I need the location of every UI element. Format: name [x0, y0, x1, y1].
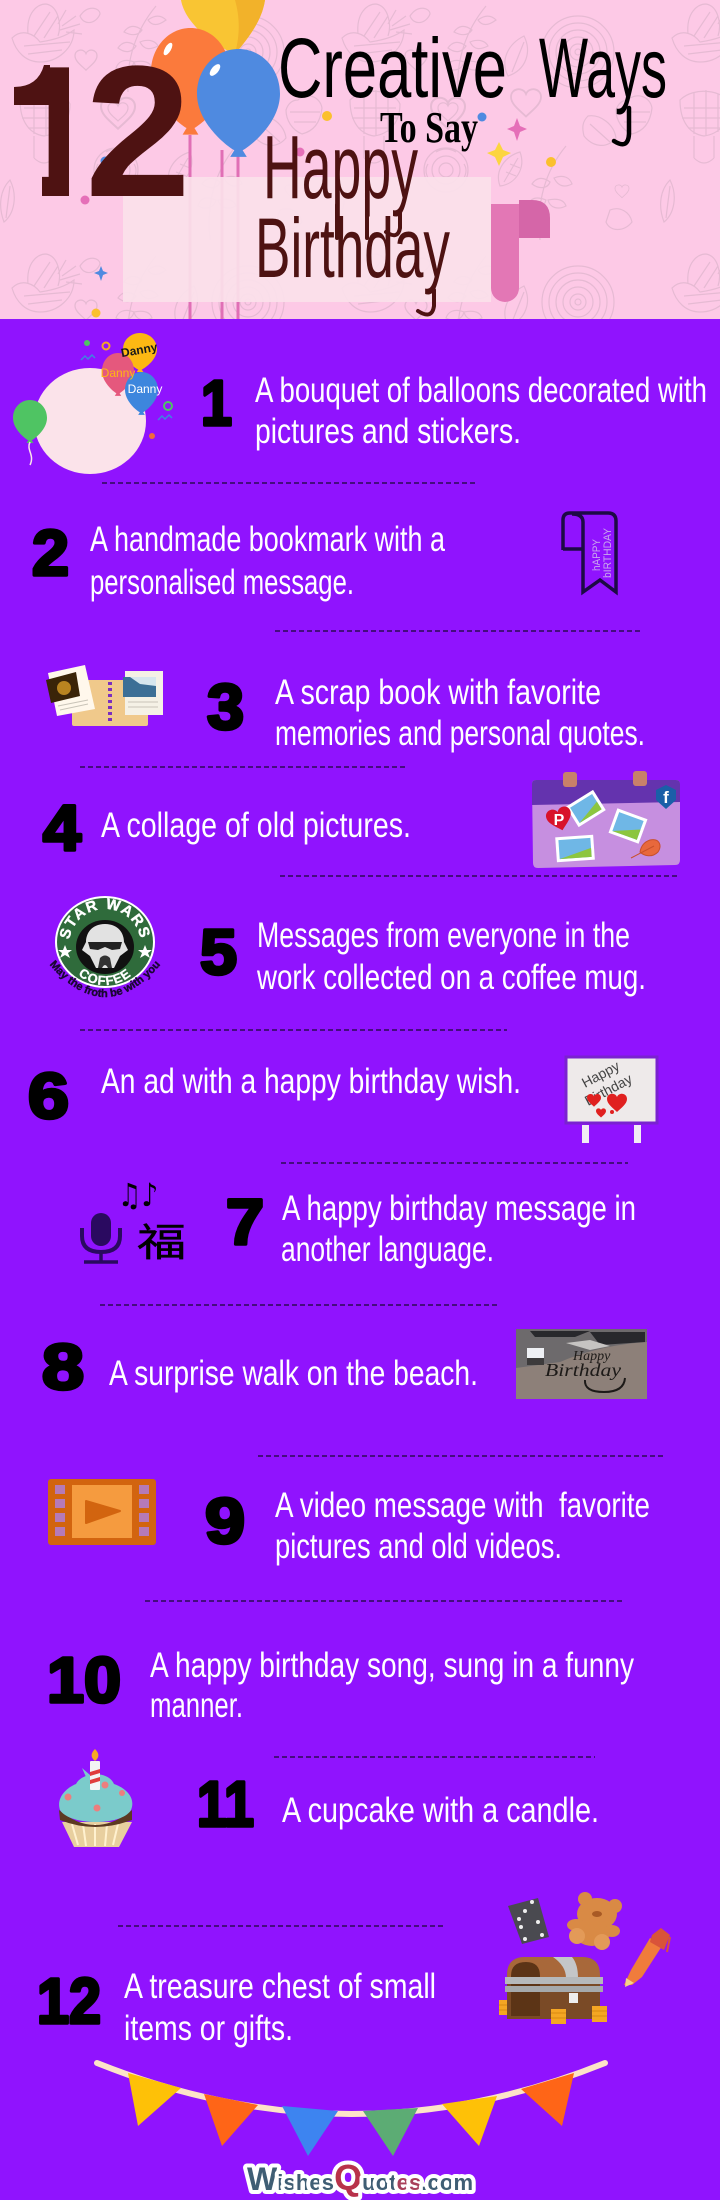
icon: star wars coffee logo: STAR WARS	[60, 898, 150, 939]
text: manner.	[150, 1686, 243, 1725]
title: Creative Ways	[278, 21, 667, 144]
icon: billboard	[566, 1057, 657, 1143]
balloon: yellow	[181, 0, 265, 54]
item 2: bookmark	[32, 513, 616, 602]
number 12: 12	[37, 1965, 101, 2037]
text: An ad with a happy birthday wish.	[101, 1062, 521, 1101]
text: A collage of old pictures.	[101, 806, 411, 845]
icon: balloon bouquet: Danny	[128, 382, 162, 396]
number 6: 6	[28, 1060, 69, 1132]
item 10: song	[47, 1644, 634, 1725]
icon: pen	[624, 1928, 670, 1987]
number 3: 3	[207, 671, 244, 743]
text: items or gifts.	[124, 2009, 293, 2048]
big number 12	[14, 65, 184, 196]
balloon: blue	[197, 49, 280, 157]
logo: WishesQuotes.com: WishesQuotes.com	[247, 2157, 473, 2198]
icon: bookmark: hAPPY	[591, 538, 603, 571]
number 2: 2	[32, 517, 69, 589]
icon: video film	[48, 1479, 156, 1545]
header pink background	[0, 0, 720, 319]
item 6: ad	[28, 1057, 657, 1143]
icon: calendar collage	[532, 771, 680, 868]
icon: balloon bouquet: Danny	[101, 366, 135, 380]
icon: scrap book	[46, 665, 163, 726]
icon: treasure chest	[499, 1957, 607, 2024]
text	[256, 916, 646, 997]
photo: birthday written on sand	[516, 1329, 647, 1399]
item 7: another language	[82, 1176, 636, 1269]
text: pictures and stickers.	[255, 412, 521, 451]
text	[275, 1486, 650, 1566]
icon: star wars coffee logo: May the froth be with you	[50, 960, 160, 998]
icon: star wars coffee logo: COFFEE	[80, 968, 131, 986]
decorative sparkles	[80, 111, 556, 318]
title: Happy	[263, 118, 418, 238]
text	[90, 520, 445, 602]
number 5: 5	[200, 916, 237, 988]
item 1: balloons	[13, 333, 707, 474]
icon: cupcake	[59, 1749, 132, 1847]
icon: billboard: Birthday	[582, 1070, 635, 1109]
photo: birthday written on sand: Birthday	[545, 1360, 621, 1380]
text: another language.	[281, 1230, 494, 1269]
text: A happy birthday message in	[282, 1189, 636, 1228]
text	[150, 1646, 634, 1725]
icon: bookmark: bIRTHDAY	[602, 527, 614, 578]
text	[281, 1189, 636, 1269]
text: pictures and old videos.	[275, 1527, 562, 1566]
big number 12: 1	[5, 27, 109, 236]
icon: bookmark	[563, 513, 616, 592]
balloon strings	[190, 135, 238, 319]
text: A treasure chest of small	[124, 1967, 436, 2006]
icon: calendar collage: f	[663, 788, 669, 807]
balloon: orange	[151, 28, 230, 135]
bunting garland	[97, 2063, 605, 2156]
text	[255, 371, 707, 451]
item 11: cupcake	[59, 1749, 599, 1847]
item 3: scrap book	[46, 665, 645, 753]
number 4: 4	[43, 792, 81, 864]
text: A scrap book with favorite	[275, 673, 601, 712]
text: A surprise walk on the beach.	[109, 1354, 478, 1393]
item 12: treasure chest	[37, 1892, 670, 2048]
title: Birthday: Birthday	[255, 201, 450, 295]
big number 12: 2	[85, 27, 191, 236]
title: To Say: To Say	[380, 103, 478, 152]
text: A cupcake with a candle.	[282, 1791, 599, 1830]
icon: domino	[508, 1898, 549, 1944]
text	[275, 673, 645, 753]
item 4: collage	[43, 771, 680, 868]
icon: balloon bouquet: Danny	[120, 340, 159, 360]
number 9: 9	[205, 1485, 245, 1557]
number 1: 1	[201, 367, 232, 439]
panel: header	[0, 0, 720, 319]
icon: balloon bouquet	[13, 333, 172, 474]
icon: music notes: ♫♪	[118, 1176, 158, 1214]
ribbon banner	[123, 177, 550, 302]
number 11: 11	[197, 1768, 254, 1840]
icon: microphone	[82, 1213, 120, 1262]
icon: calendar collage: P	[554, 812, 565, 829]
icon: fu character: 福	[137, 1222, 186, 1265]
title: Creative Ways: Creative	[278, 21, 507, 115]
text: A handmade bookmark with a	[90, 520, 445, 559]
item 5: coffee mug	[50, 896, 646, 998]
text	[124, 1967, 436, 2048]
icon: star wars coffee logo	[50, 896, 160, 998]
title: Birthday	[255, 201, 450, 315]
number 8: 8	[42, 1331, 84, 1403]
number 7: 7	[226, 1186, 264, 1258]
item 8: beach	[42, 1329, 647, 1403]
icon: teddy bear	[567, 1892, 622, 1950]
number 10: 10	[47, 1644, 121, 1716]
text: personalised message.	[90, 563, 354, 602]
item 9: video	[48, 1479, 650, 1566]
photo: birthday written on sand: Happy	[572, 1349, 611, 1364]
icon: billboard: Happy	[579, 1058, 622, 1091]
title: Happy: Happy	[263, 118, 418, 218]
